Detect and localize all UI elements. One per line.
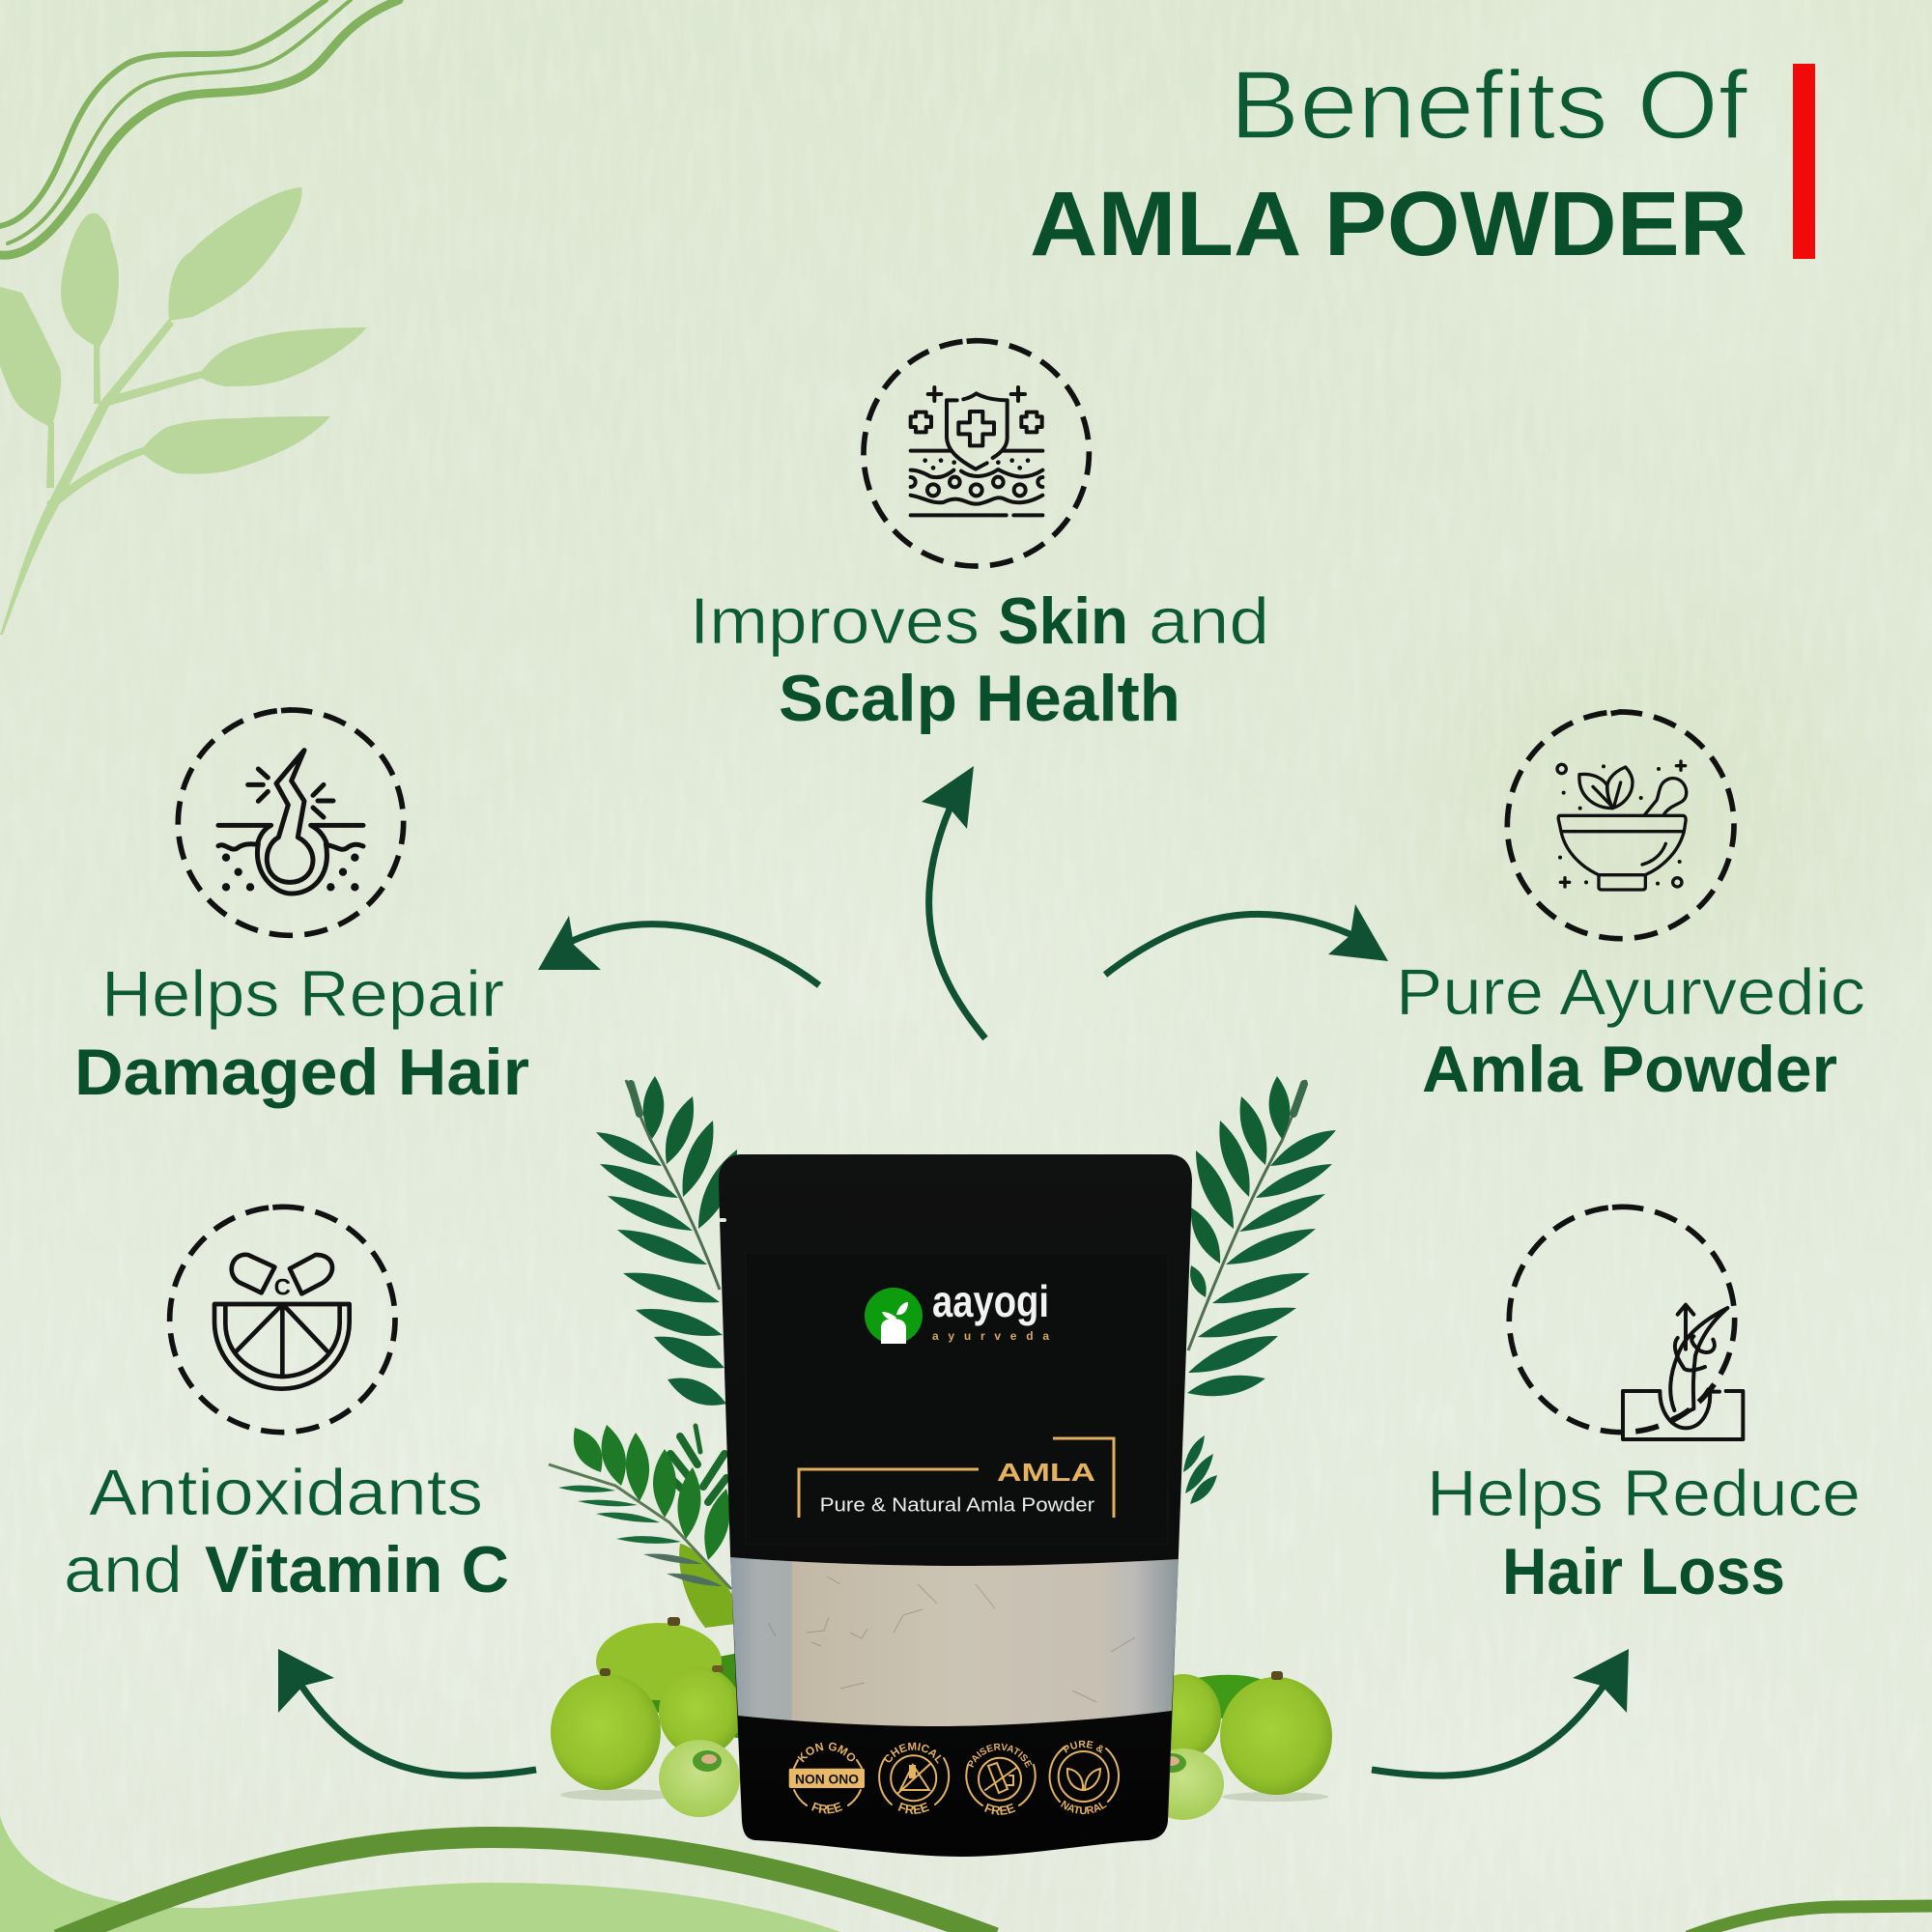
badge: non GMO: NON ONO xyxy=(795,1772,859,1787)
benefit: skin and scalp xyxy=(690,339,1269,735)
label: skin and scalp: Skin xyxy=(998,584,1128,658)
title line 1: Benefits Of xyxy=(1230,51,1747,159)
label: skin and scalp: and xyxy=(1149,584,1269,658)
icon: citrus slice with capsule: C xyxy=(274,1275,291,1301)
benefit: pure ayurvedic xyxy=(1396,710,1865,1106)
badge: non GMO: KON GMO xyxy=(797,1743,856,1762)
arrow: to skin and scalp xyxy=(922,766,985,1038)
logo xyxy=(865,1276,1049,1344)
bottom dark green wave xyxy=(58,1837,995,1932)
arrow: to pure ayurvedic xyxy=(1105,904,1388,975)
label: pure ayurvedic xyxy=(1396,955,1865,1106)
title xyxy=(1030,51,1747,275)
amla fruits right xyxy=(1143,1671,1332,1820)
label: hair loss: Hair Loss xyxy=(1502,1535,1785,1608)
badge: non GMO: FREE xyxy=(811,1803,842,1814)
badge: non GMO xyxy=(788,1743,865,1814)
gold frame xyxy=(799,1438,1114,1518)
badge: chemical free xyxy=(878,1743,951,1814)
left upper fern xyxy=(596,1076,737,1406)
icon: skin shield xyxy=(862,339,1091,568)
badge: chemical free: CHEMICAL xyxy=(885,1743,941,1764)
decorative top-left branch xyxy=(0,187,367,635)
powder texture xyxy=(768,1577,1135,1702)
label: damaged hair xyxy=(74,957,529,1109)
lower left fern xyxy=(549,1425,744,1628)
product pouch xyxy=(719,1154,1192,1857)
icon: hair root xyxy=(1507,1205,1743,1439)
arrow: to damaged hair xyxy=(538,916,819,985)
label: pure ayurvedic: Pure Ayurvedic xyxy=(1396,955,1865,1029)
label: damaged hair: Damaged Hair xyxy=(74,1036,529,1109)
label: hair loss xyxy=(1427,1457,1861,1608)
title line 2: AMLA POWDER xyxy=(1030,173,1747,275)
badge: pure and natural: PURE & xyxy=(1063,1741,1103,1753)
badge: preservative free: FREE xyxy=(984,1803,1016,1815)
bottom light green shape xyxy=(0,1816,840,1932)
badge: preservative free xyxy=(965,1743,1037,1815)
label: damaged hair: Helps Repair xyxy=(101,957,504,1031)
arrow: to antioxidants xyxy=(278,1649,536,1776)
badge: pure and natural xyxy=(1049,1741,1121,1814)
decorative top-left wavy lines xyxy=(0,0,399,255)
logo: aayogi xyxy=(932,1276,1049,1326)
icon: mortar and pestle xyxy=(1505,710,1736,941)
arrow: to hair loss xyxy=(1372,1649,1629,1776)
benefit: damaged hair xyxy=(74,708,529,1109)
label: pure ayurvedic: Amla Powder xyxy=(1422,1033,1837,1106)
badge: chemical free: FREE xyxy=(898,1803,929,1814)
label: hair loss: Helps Reduce xyxy=(1427,1457,1861,1530)
label: antioxidants and vitamin C xyxy=(64,1456,509,1606)
amla fruits left xyxy=(551,1617,744,1817)
logo: ayurveda xyxy=(932,1329,1049,1343)
bottom right wave xyxy=(1688,1906,1932,1932)
right upper fern xyxy=(1183,1076,1336,1504)
pouch body xyxy=(719,1154,1192,1857)
label: skin and scalp xyxy=(690,584,1269,735)
benefit: hair loss xyxy=(1427,1205,1861,1608)
label: skin and scalp: Improves xyxy=(690,584,980,658)
icon: citrus slice with capsule xyxy=(168,1205,397,1435)
label: antioxidants and vitamin C: Vitamin C xyxy=(205,1533,509,1606)
red accent bar xyxy=(1793,64,1815,259)
label: skin and scalp: Scalp Health xyxy=(779,662,1180,735)
powder window xyxy=(730,1557,1179,1726)
benefit: antioxidants and vitamin C xyxy=(64,1205,509,1606)
label: antioxidants and vitamin C: Antioxidants xyxy=(89,1456,483,1529)
icon: cracked hair follicle xyxy=(176,708,406,937)
product subtitle: Pure & Natural Amla Powder xyxy=(820,1494,1094,1516)
label: antioxidants and vitamin C: and xyxy=(64,1533,183,1606)
product name: AMLA xyxy=(997,1458,1095,1487)
badge: preservative free: PAISERVATISE xyxy=(967,1743,1033,1768)
badge: pure and natural: NATURAL xyxy=(1061,1801,1107,1814)
